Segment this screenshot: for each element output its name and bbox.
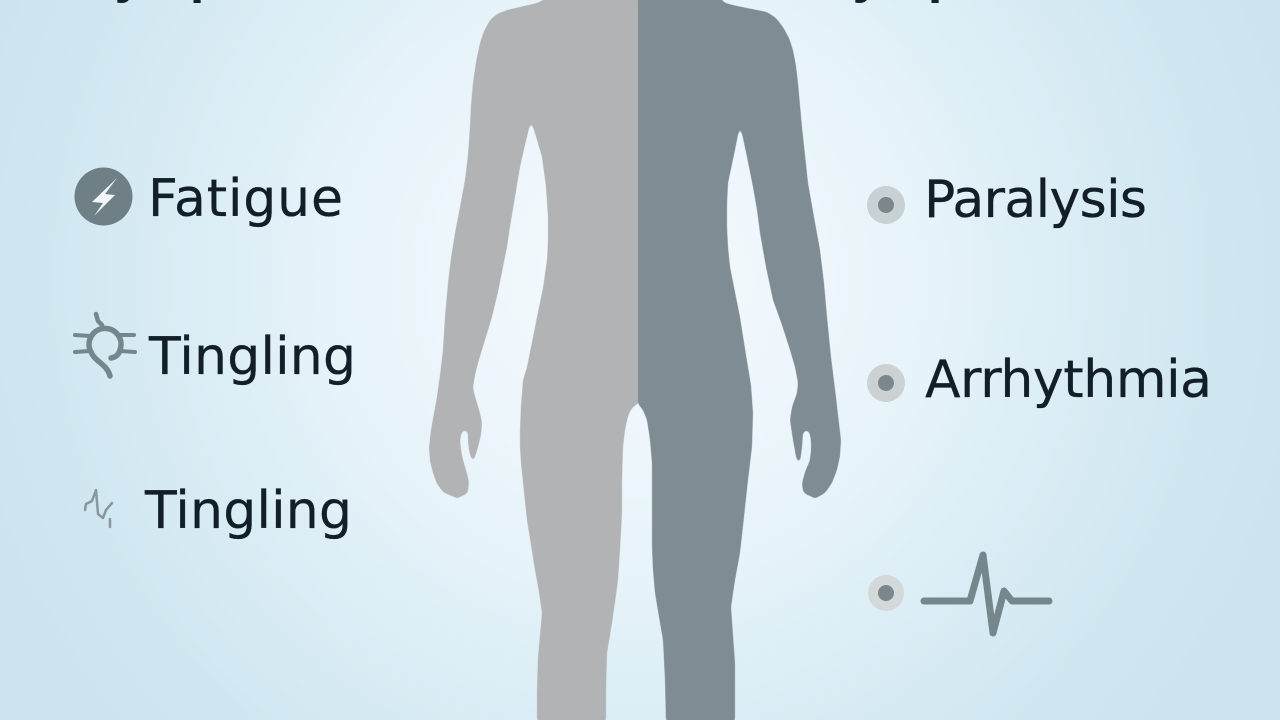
left body half [429,0,639,720]
left symptom: fatigue [74,168,343,229]
left symptom: tingling with nerve icon [75,314,356,387]
heading fragments: left and right column titles cropped at top edge [80,0,1084,4]
left symptom: tingling with squiggle icon [85,481,352,541]
right body half [638,0,841,720]
label: Tingling: Tingling [144,481,352,541]
right symptom: paralysis [867,170,1147,230]
icon: lightning bolt in circle [74,168,132,226]
icon: dot marker [867,364,905,402]
icon: small squiggle [85,490,112,527]
icon: ECG line [924,555,1049,633]
right symptom: heartbeat trace [868,555,1049,633]
label: Paralysis: Paralysis [924,170,1147,230]
human body silhouette [429,0,841,720]
label: Arrhythmia: Arrhythmia [925,350,1212,410]
label: Fatigue: Fatigue [148,169,343,229]
icon: nerve ring [75,314,135,376]
right symptom: arrhythmia [867,350,1212,410]
icon: dot marker [867,186,905,224]
label: Tingling: Tingling [148,327,356,387]
icon: dot marker [868,575,904,611]
